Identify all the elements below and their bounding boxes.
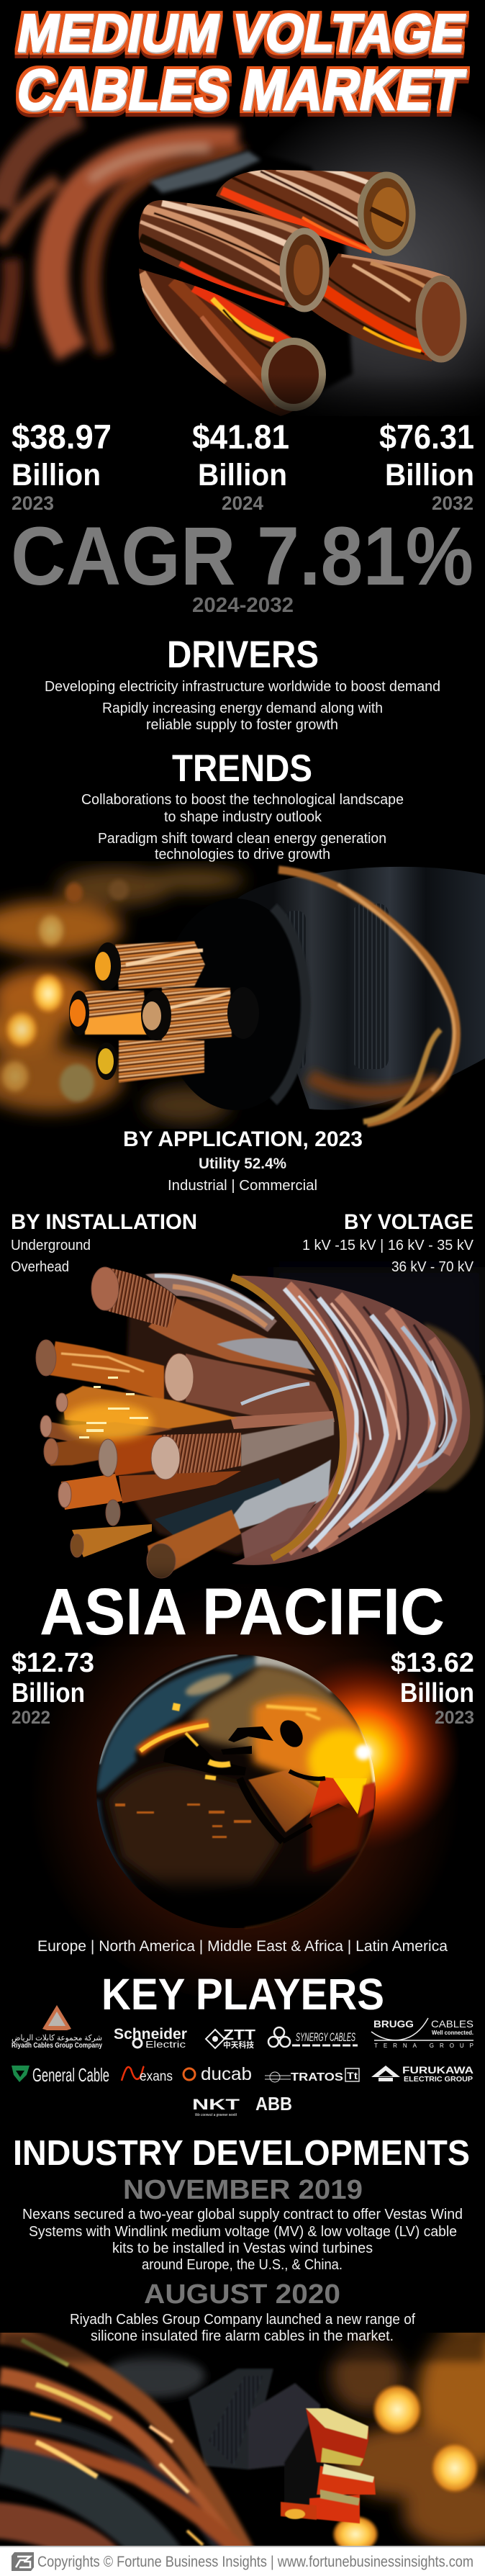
logo: NKT <box>192 2097 240 2117</box>
logo: ABB: ABB <box>255 2093 292 2115</box>
voltage segment: 36 kV - 70 kV <box>391 1259 474 1275</box>
cable rear cap <box>425 1323 485 1490</box>
logo: NKT: We connect a greener world <box>195 2113 237 2117</box>
installation segment: Underground <box>11 1238 91 1253</box>
development: August 2020 <box>70 2279 415 2344</box>
logo: Furukawa <box>371 2064 473 2084</box>
drivers section: Rapidly increasing energy demand along with <box>102 701 383 716</box>
development: November 2019: around Europe, the U.S., & China. <box>142 2257 343 2273</box>
stat 2024: $41.81 <box>192 418 289 456</box>
cable connector image <box>0 867 485 1124</box>
gold conductors <box>281 2408 376 2523</box>
logo: Schneider Electric <box>114 2026 187 2050</box>
glowing orange strands <box>45 1341 237 1476</box>
conductor strands <box>69 940 232 1083</box>
stat 2032: Billion <box>385 458 474 492</box>
strand cut ends <box>36 1267 194 1578</box>
dark core filling between strands <box>122 1296 345 1555</box>
development: November 2019 <box>22 2175 463 2273</box>
stat 2023: 2023 <box>12 492 54 514</box>
regional value 2022: 2022 <box>12 1708 50 1728</box>
regional heading: ASIA PACIFIC <box>40 1575 445 1649</box>
logo: Tratos: Tt <box>347 2070 358 2081</box>
other regions: Europe | North America | Middle East & Africa | Latin America <box>37 1938 448 1955</box>
strand: lower <box>139 269 292 416</box>
installation segment: Overhead <box>11 1259 69 1275</box>
logo: Schneider Electric: Electric <box>145 2039 186 2050</box>
development: November 2019: NOVEMBER 2019 <box>123 2175 363 2205</box>
strand: middle left <box>137 198 313 310</box>
logo: Tratos: TRATOS <box>291 2071 343 2084</box>
logo: Riyadh Cables: Riyadh Cables Group Company <box>12 2042 102 2050</box>
application segment <box>123 1127 363 1194</box>
cable barrel <box>161 867 485 1110</box>
drivers section <box>45 634 440 733</box>
regional value 2023: Billion <box>400 1678 474 1708</box>
logo: Nexans: exans <box>140 2069 173 2084</box>
development: August 2020: AUGUST 2020 <box>144 2279 340 2310</box>
development: August 2020: silicone insulated fire alarm cables in the market. <box>91 2328 394 2344</box>
sparks <box>79 1377 148 1438</box>
cut ends of strands <box>265 175 463 407</box>
logo: Riyadh Cables: شركة مجموعة كابلات الرياض <box>12 2034 102 2043</box>
logo: ZTT: ZTT <box>223 2027 255 2043</box>
logo: ducab: ducab <box>201 2064 252 2084</box>
logo: Brugg Cables: CABLES <box>431 2018 473 2030</box>
stat 2023: $38.97 <box>12 418 112 456</box>
connector <box>189 2368 327 2504</box>
trends section: Paradigm shift toward clean energy generation <box>98 831 386 847</box>
logo: Synergy Cables <box>268 2027 358 2047</box>
upper silver strand <box>145 1273 277 1332</box>
footer <box>0 2546 485 2576</box>
logo: Furukawa: FURUKAWA <box>402 2064 473 2076</box>
top copper strand <box>105 1267 177 1328</box>
logo: Furukawa: ELECTRIC GROUP <box>404 2076 473 2084</box>
front copper strand <box>241 1418 334 1467</box>
logo: Nexans <box>122 2066 173 2084</box>
gold binding band <box>232 1277 343 1558</box>
logo: General Cable: General Cable <box>32 2064 109 2086</box>
logo: Tratos <box>265 2068 359 2084</box>
trends section: TRENDS <box>172 747 312 790</box>
title <box>12 3 471 122</box>
logo: ZTT <box>206 2027 255 2050</box>
trends section: to shape industry outlook <box>164 809 322 825</box>
installation segment <box>11 1210 197 1275</box>
logo: Brugg Cables: BRUGG <box>373 2018 414 2030</box>
strand: top <box>216 170 381 253</box>
stat 2024 <box>192 418 289 514</box>
hero image: stranded copper cable <box>0 94 485 421</box>
stat 2032: 2032 <box>432 492 473 514</box>
development: November 2019: kits to be installed in Vestas wind turbines <box>112 2241 373 2256</box>
logo: Brugg Cables: Well connected. <box>432 2030 473 2036</box>
drivers section: DRIVERS <box>167 634 319 676</box>
trends section <box>81 747 404 863</box>
logo: Brugg Cables: TERNA GROUP <box>374 2043 473 2049</box>
logo: Riyadh Cables <box>12 2005 102 2050</box>
stat 2023: Billion <box>12 458 101 492</box>
stat 2032 <box>379 418 474 514</box>
development: November 2019: Systems with Windlink medium voltage (MV) & low voltage (LV) cable <box>29 2224 457 2240</box>
logo: Brugg Cables <box>371 2018 473 2049</box>
icon: Fortune Business Insights logo <box>12 2552 34 2571</box>
installation segment: BY INSTALLATION <box>11 1210 197 1234</box>
regional value 2023 <box>391 1648 474 1728</box>
city lights <box>139 1724 209 1752</box>
development: November 2019: Nexans secured a two-year global supply contract to offer Vestas Wind <box>22 2207 463 2223</box>
key player logos <box>12 2005 473 2117</box>
globe illustration <box>45 1565 458 1993</box>
twisted copper bundle image <box>36 1267 485 1578</box>
trends section: Collaborations to boost the technological landscape <box>81 792 404 808</box>
trends section: technologies to drive growth <box>155 847 330 863</box>
regional value 2022: $12.73 <box>12 1648 94 1678</box>
development: August 2020: Riyadh Cables Group Company launched a new range of <box>70 2312 415 2328</box>
application segment: Utility 52.4% <box>199 1156 286 1172</box>
regional value 2023: $13.62 <box>391 1648 474 1678</box>
CAGR period: 2024-2032 <box>192 594 294 617</box>
stat 2032: $76.31 <box>379 418 474 456</box>
drivers section: reliable supply to foster growth <box>146 717 338 733</box>
middle strand <box>186 1354 332 1417</box>
logo: Synergy Cables: SYNERGY CABLES <box>296 2030 355 2044</box>
regional value 2022: Billion <box>12 1678 85 1708</box>
twisted barrel <box>230 1267 482 1570</box>
logo: General Cable <box>12 2064 109 2086</box>
drivers section: Developing electricity infrastructure worldwide to boost demand <box>45 679 440 695</box>
twisted copper wires <box>278 870 456 1123</box>
stat 2023 <box>12 418 112 514</box>
logo: Schneider Electric: Schneider <box>114 2026 187 2043</box>
industry developments heading: INDUSTRY DEVELOPMENTS <box>13 2134 470 2173</box>
copper strand behind top end <box>148 1298 315 1375</box>
regional value 2023: 2023 <box>435 1708 474 1728</box>
voltage segment <box>302 1210 474 1275</box>
copper wires and connector image <box>0 2333 485 2546</box>
market size stats <box>12 418 474 514</box>
stat 2024: 2024 <box>222 492 263 514</box>
application segment: BY APPLICATION, 2023 <box>123 1127 363 1151</box>
voltage segment: BY VOLTAGE <box>344 1210 473 1234</box>
logo: NKT: NKT <box>192 2097 240 2113</box>
regional value 2022 <box>12 1648 94 1728</box>
bokeh lights <box>332 2384 479 2553</box>
stat 2024: Billion <box>198 458 287 492</box>
bokeh lights <box>0 880 129 1102</box>
lower strands <box>155 1478 288 1541</box>
strand: lower right <box>312 253 450 361</box>
copper wires <box>0 2335 248 2563</box>
key players heading: KEY PLAYERS <box>101 1970 384 2019</box>
application segment: Industrial | Commercial <box>168 1178 317 1194</box>
voltage segment: 1 kV -15 kV | 16 kV - 35 kV <box>302 1238 474 1253</box>
logo: ZTT: 中天科技 <box>223 2040 254 2050</box>
